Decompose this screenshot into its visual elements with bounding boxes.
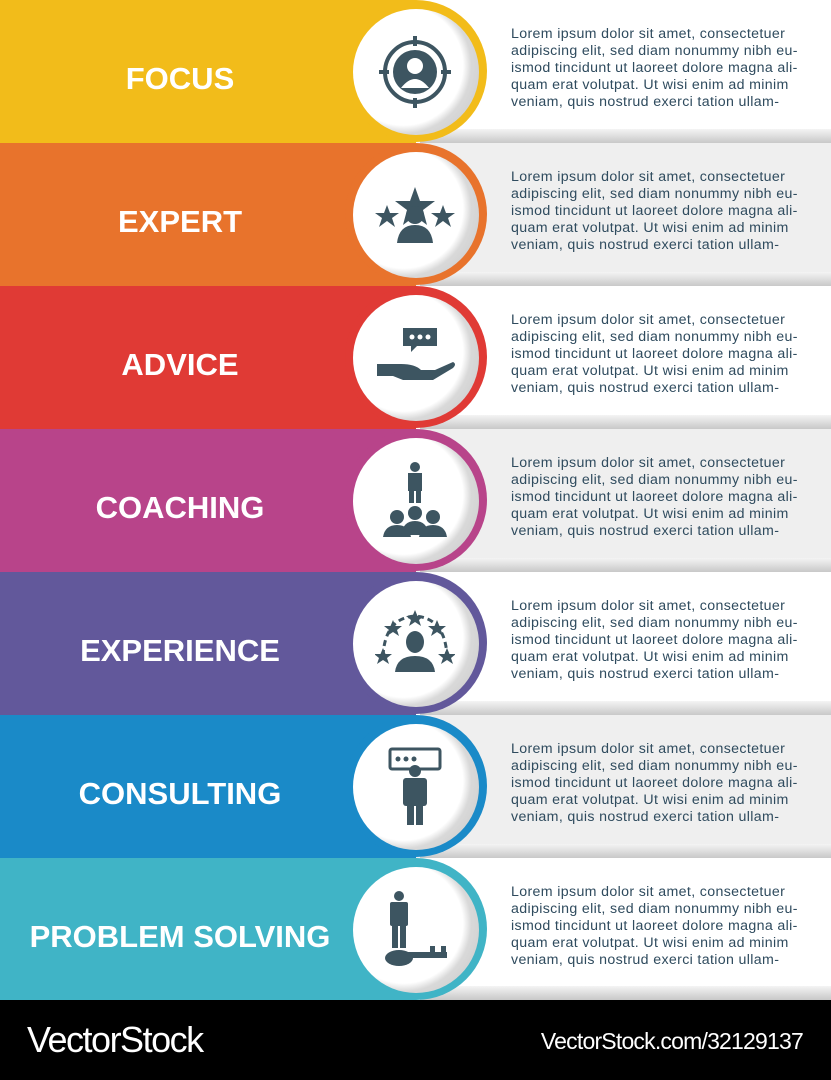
- text block: [511, 26, 798, 110]
- footer brand: VectorStock: [27, 1019, 203, 1060]
- text block: ismod tincidunt ut laoreet dolore magna ali-: [511, 60, 798, 76]
- text block: veniam, quis nostrud exerci tation ullam-: [511, 952, 779, 968]
- row: experience: [0, 572, 831, 715]
- text block: Lorem ipsum dolor sit amet, consectetuer: [511, 884, 785, 900]
- text block: adipiscing elit, sed diam nonummy nibh eu-: [511, 615, 798, 631]
- text block: veniam, quis nostrud exerci tation ullam-: [511, 666, 779, 682]
- text block: ismod tincidunt ut laoreet dolore magna ali-: [511, 632, 798, 648]
- icon: stars person: [375, 187, 455, 243]
- text block: ismod tincidunt ut laoreet dolore magna ali-: [511, 775, 798, 791]
- row: problem solving: [0, 858, 831, 1000]
- heading: ADVICE: ADVICE: [121, 347, 239, 382]
- text block: [511, 884, 798, 968]
- heading: EXPERT: EXPERT: [118, 204, 242, 239]
- text block: veniam, quis nostrud exerci tation ullam-: [511, 237, 779, 253]
- text block: adipiscing elit, sed diam nonummy nibh eu-: [511, 186, 798, 202]
- heading: PROBLEM SOLVING: PROBLEM SOLVING: [30, 919, 330, 954]
- icon: hand with speech bubble: [377, 328, 455, 380]
- text block: [511, 598, 798, 682]
- text block: [511, 741, 798, 825]
- text block: quam erat volutpat. Ut wisi enim ad minim: [511, 506, 789, 522]
- text block: adipiscing elit, sed diam nonummy nibh eu-: [511, 329, 798, 345]
- text block: ismod tincidunt ut laoreet dolore magna ali-: [511, 489, 798, 505]
- text block: Lorem ipsum dolor sit amet, consectetuer: [511, 741, 785, 757]
- row: advice: [0, 286, 831, 429]
- text block: veniam, quis nostrud exerci tation ullam-: [511, 380, 779, 396]
- text block: ismod tincidunt ut laoreet dolore magna ali-: [511, 346, 798, 362]
- text block: veniam, quis nostrud exerci tation ullam-: [511, 809, 779, 825]
- text block: quam erat volutpat. Ut wisi enim ad minim: [511, 220, 789, 236]
- text block: Lorem ipsum dolor sit amet, consectetuer: [511, 26, 785, 42]
- text block: [511, 455, 798, 539]
- text block: [511, 312, 798, 396]
- text block: Lorem ipsum dolor sit amet, consectetuer: [511, 598, 785, 614]
- row: focus: [0, 0, 831, 143]
- text block: quam erat volutpat. Ut wisi enim ad minim: [511, 649, 789, 665]
- text block: quam erat volutpat. Ut wisi enim ad minim: [511, 935, 789, 951]
- row: consulting: [0, 715, 831, 858]
- text block: ismod tincidunt ut laoreet dolore magna ali-: [511, 918, 798, 934]
- icon: consultant with speech bubble: [388, 748, 442, 825]
- text block: Lorem ipsum dolor sit amet, consectetuer: [511, 455, 785, 471]
- heading: CONSULTING: CONSULTING: [79, 776, 281, 811]
- text block: adipiscing elit, sed diam nonummy nibh eu-: [511, 758, 798, 774]
- heading: COACHING: COACHING: [96, 490, 264, 525]
- footer: [0, 1000, 831, 1080]
- text block: adipiscing elit, sed diam nonummy nibh eu-: [511, 901, 798, 917]
- row: coaching: [0, 429, 831, 572]
- text block: adipiscing elit, sed diam nonummy nibh eu-: [511, 43, 798, 59]
- footer url: VectorStock.com/32129137: [541, 1028, 803, 1054]
- text block: quam erat volutpat. Ut wisi enim ad minim: [511, 77, 789, 93]
- icon: person on key: [385, 891, 447, 966]
- heading: FOCUS: FOCUS: [126, 61, 234, 96]
- icon: person with star arc: [375, 610, 455, 672]
- text block: veniam, quis nostrud exerci tation ullam-: [511, 94, 779, 110]
- icon: target person: [379, 36, 451, 108]
- text block: [511, 169, 798, 253]
- text block: adipiscing elit, sed diam nonummy nibh eu-: [511, 472, 798, 488]
- row: expert: [0, 143, 831, 286]
- text block: veniam, quis nostrud exerci tation ullam-: [511, 523, 779, 539]
- text block: quam erat volutpat. Ut wisi enim ad minim: [511, 363, 789, 379]
- text block: Lorem ipsum dolor sit amet, consectetuer: [511, 169, 785, 185]
- text block: quam erat volutpat. Ut wisi enim ad minim: [511, 792, 789, 808]
- heading: EXPERIENCE: EXPERIENCE: [80, 633, 280, 668]
- text block: ismod tincidunt ut laoreet dolore magna ali-: [511, 203, 798, 219]
- text block: Lorem ipsum dolor sit amet, consectetuer: [511, 312, 785, 328]
- icon: coach and team: [383, 462, 447, 537]
